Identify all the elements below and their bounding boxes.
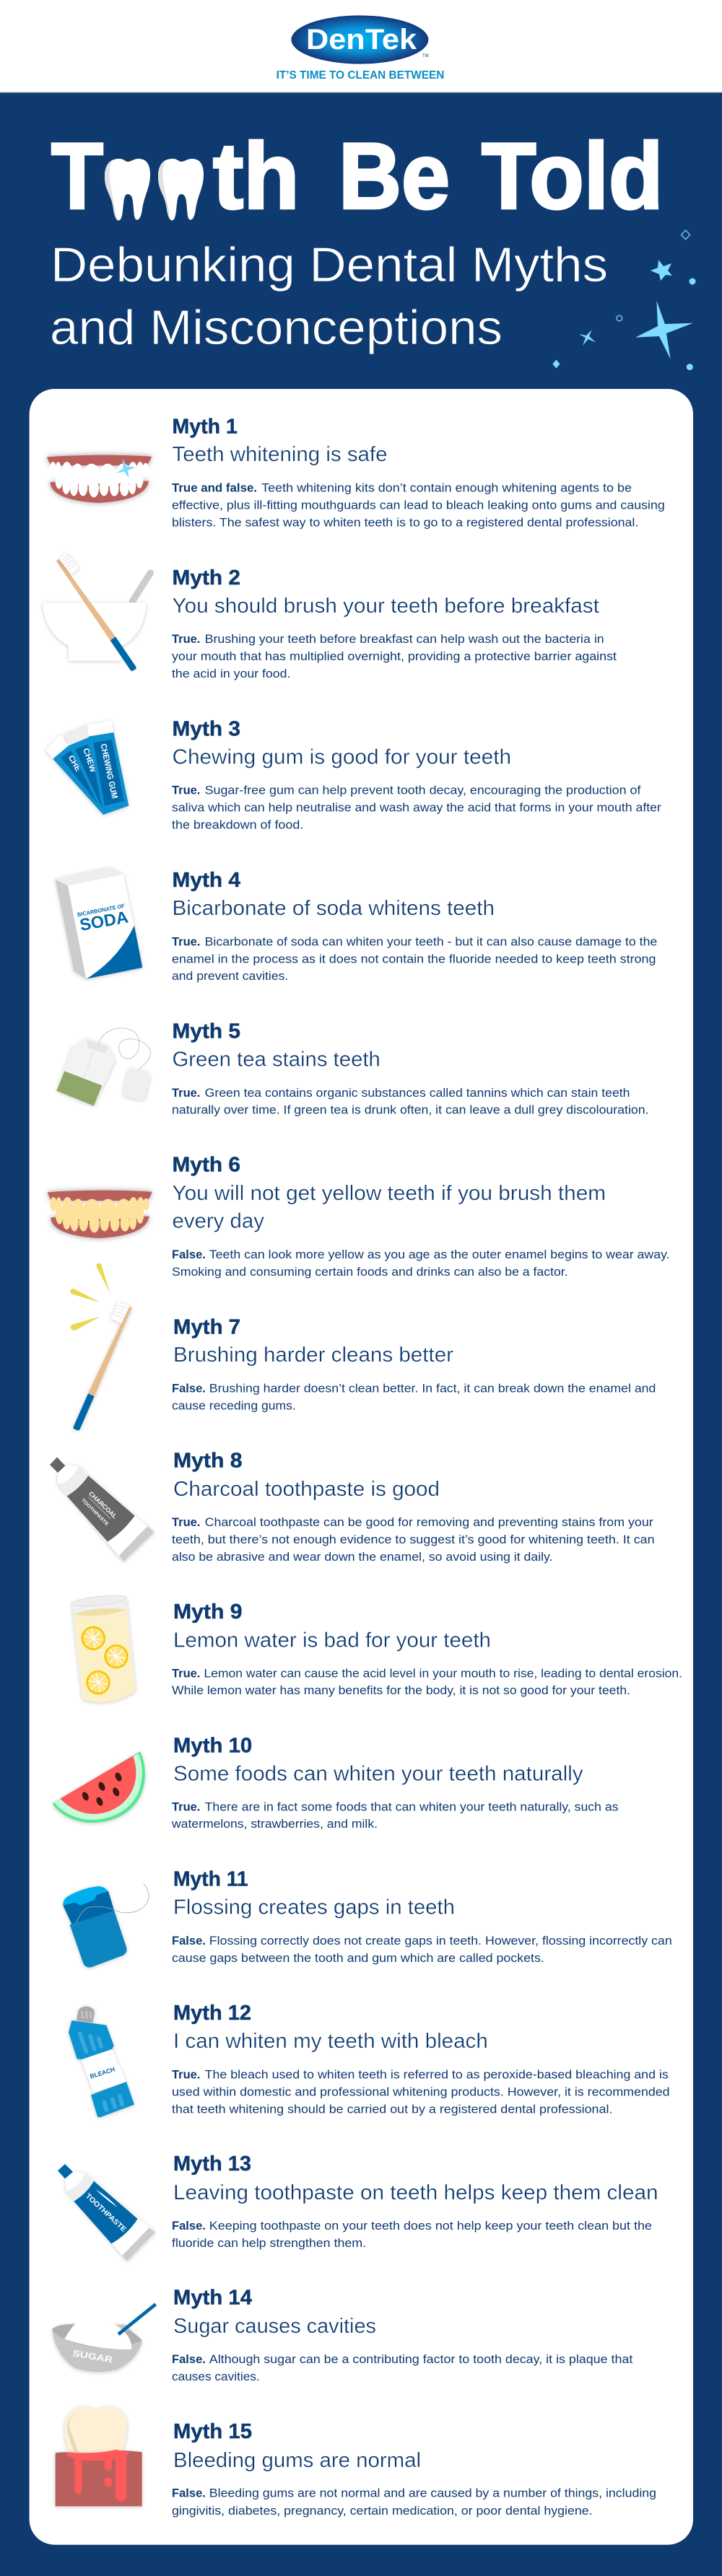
icon: chewing gum sticks bbox=[45, 720, 129, 815]
body text: Teeth can look more yellow as you age as the outer enamel begins to wear away. bbox=[209, 1248, 670, 1261]
body text bbox=[172, 1087, 648, 1117]
body text: gingivitis, diabetes, pregnancy, certain medication, or poor dental hygiene. bbox=[172, 2505, 593, 2518]
body text: Bicarbonate of soda can whiten your teeth - but it can also cause damage to the bbox=[205, 935, 657, 948]
body text bbox=[172, 1667, 682, 1697]
icon: toothbrush with yellow rays bbox=[70, 1263, 132, 1430]
logo: DenTek oval: DenTek bbox=[306, 24, 417, 56]
body text: False. bbox=[172, 1248, 206, 1261]
panel: myths card bbox=[30, 389, 693, 2545]
body text: True. bbox=[172, 633, 200, 646]
body text bbox=[172, 1248, 670, 1279]
icon: yellow teeth bbox=[48, 1191, 152, 1238]
body text: that teeth whitening should be carried out by a registered dental professional. bbox=[172, 2103, 612, 2116]
body text bbox=[172, 2220, 652, 2250]
body text: blisters. The safest way to whiten teeth is to go to a registered dental professional. bbox=[172, 516, 638, 529]
body text: the breakdown of food. bbox=[172, 818, 303, 831]
body text: Teeth whitening kits don’t contain enough whitening agents to be bbox=[261, 482, 632, 495]
body text: enamel in the process as it does not contain the fluoride needed to keep teeth strong bbox=[172, 952, 656, 965]
myth 10: Myth 10 bbox=[173, 1735, 252, 1758]
myth 6: every day bbox=[172, 1210, 265, 1233]
myth 1: Myth 1 bbox=[172, 416, 238, 439]
icon: blue toothpaste tube: TOOTHPASTE bbox=[84, 2192, 128, 2234]
body text: the acid in your food. bbox=[172, 667, 290, 680]
body text: False. bbox=[172, 1935, 206, 1948]
logo tagline: IT’S TIME TO CLEAN BETWEEN bbox=[277, 69, 444, 82]
body text: causes cavities. bbox=[172, 2370, 260, 2383]
subtitle: and Misconceptions bbox=[50, 300, 503, 355]
body text: Although sugar can be a contributing factor to tooth decay, it is plaque that bbox=[209, 2353, 633, 2366]
body text: Bleeding gums are not normal and are caused by a number of things, including bbox=[209, 2487, 656, 2500]
myth 3: Chewing gum is good for your teeth bbox=[172, 745, 511, 768]
myth 13 bbox=[58, 2152, 658, 2261]
logo: DenTek oval bbox=[291, 15, 429, 64]
myth 12: Myth 12 bbox=[173, 2002, 251, 2025]
body text: There are in fact some foods that can whiten your teeth naturally, such as bbox=[205, 1801, 619, 1814]
body text bbox=[172, 935, 657, 983]
body text: False. bbox=[172, 1383, 206, 1396]
myth 9 bbox=[71, 1593, 682, 1702]
body text: True. bbox=[172, 1087, 200, 1100]
body text: Flossing correctly does not create gaps in teeth. However, flossing incorrectly can bbox=[209, 1935, 672, 1948]
icon: glass of lemon water bbox=[71, 1593, 136, 1702]
myth 7: Brushing harder cleans better bbox=[173, 1344, 454, 1367]
myth 13: Myth 13 bbox=[173, 2152, 251, 2176]
body text: teeth, but there’s not enough evidence to suggest it’s good for whitening teeth. It can bbox=[172, 1533, 655, 1546]
myth 8 bbox=[50, 1449, 655, 1564]
body text bbox=[172, 2487, 656, 2518]
myth 14: Myth 14 bbox=[173, 2287, 252, 2310]
logo: DenTek oval: TM bbox=[422, 54, 429, 58]
body text bbox=[172, 633, 617, 680]
myth 8: Myth 8 bbox=[173, 1449, 243, 1472]
subtitle: Debunking Dental Myths bbox=[51, 237, 608, 292]
icon: charcoal toothpaste tube: TOOTHPASTE bbox=[80, 1498, 110, 1527]
myth 2 bbox=[43, 553, 617, 680]
body text: True. bbox=[172, 1801, 200, 1814]
body text: False. bbox=[172, 2220, 206, 2233]
icon: charcoal toothpaste tube: CHARCOAL bbox=[87, 1490, 119, 1520]
myth 7: Myth 7 bbox=[173, 1315, 240, 1339]
icon: dental floss box bbox=[63, 1884, 149, 1968]
icon: bleach bottle: BLEACH bbox=[89, 2066, 116, 2080]
body text bbox=[172, 2068, 670, 2116]
icon: chewing gum sticks: CHEW bbox=[81, 747, 97, 774]
icon: tooth with bleeding gum bbox=[56, 2407, 142, 2506]
icon: green tea bag bbox=[56, 1028, 151, 1106]
icon: bicarbonate of soda box: BICARBONATE OF bbox=[77, 903, 126, 918]
icon: tooth letter o second bbox=[158, 159, 204, 220]
icon: bicarbonate of soda box: SODA bbox=[78, 908, 130, 934]
icon: blue toothpaste tube bbox=[58, 2164, 155, 2261]
body text: The bleach used to whiten teeth is referred to as peroxide-based bleaching and is bbox=[205, 2068, 669, 2081]
body text: your mouth that has multiplied overnight, providing a protective barrier against bbox=[172, 650, 617, 663]
myth 5 bbox=[56, 1020, 649, 1117]
body text: cause gaps between the tooth and gum which are called pockets. bbox=[172, 1952, 544, 1965]
body text: Lemon water can cause the acid level in your mouth to rise, leading to dental erosion. bbox=[204, 1667, 682, 1680]
icon: sugar bowl with spoon bbox=[52, 2304, 156, 2372]
body text: Brushing your teeth before breakfast can help wash out the bacteria in bbox=[205, 633, 604, 646]
body text: naturally over time. If green tea is drunk often, it can leave a dull grey discolouration. bbox=[172, 1104, 648, 1117]
myth 9: Myth 9 bbox=[173, 1600, 243, 1624]
myth 4 bbox=[56, 867, 657, 983]
body text: and prevent cavities. bbox=[172, 970, 288, 983]
body text bbox=[171, 1801, 618, 1831]
subtitle bbox=[50, 237, 608, 355]
title: Tooth Be Told: th bbox=[213, 123, 300, 229]
myth 13: Leaving toothpaste on teeth helps keep them clean bbox=[173, 2181, 658, 2204]
myth 5: Myth 5 bbox=[172, 1020, 240, 1043]
myth 6: Myth 6 bbox=[172, 1153, 240, 1176]
icon: watermelon slice bbox=[53, 1751, 145, 1823]
myth 4: Myth 4 bbox=[172, 869, 240, 892]
myth 7 bbox=[70, 1263, 656, 1430]
icon: bowl and toothbrush bbox=[43, 553, 150, 671]
myth 12: I can whiten my teeth with bleach bbox=[173, 2030, 488, 2053]
myth 10 bbox=[53, 1735, 619, 1831]
title: Tooth Be Told: T bbox=[51, 123, 103, 229]
myth 14 bbox=[52, 2287, 633, 2383]
body text: Smoking and consuming certain foods and drinks can also be a factor. bbox=[172, 1266, 568, 1279]
icon: bicarbonate of soda box bbox=[56, 867, 142, 979]
icon: sugar bowl with spoon: SUGAR bbox=[71, 2348, 113, 2365]
myth 11: Myth 11 bbox=[173, 1868, 248, 1891]
body text: watermelons, strawberries, and milk. bbox=[171, 1818, 378, 1831]
title: Tooth Be Told: Be bbox=[339, 123, 450, 229]
body text: used within domestic and professional whitening products. However, it is recommended bbox=[172, 2085, 670, 2098]
myth 9: Lemon water is bad for your teeth bbox=[173, 1629, 491, 1652]
body text: Keeping toothpaste on your teeth does not help keep your teeth clean but the bbox=[209, 2220, 652, 2233]
myth 15: Myth 15 bbox=[173, 2420, 252, 2443]
icon: chewing gum sticks: CHEWING GUM bbox=[98, 743, 119, 799]
icon: sparkles bbox=[552, 230, 696, 370]
body text: True. bbox=[172, 935, 200, 948]
myth 4: Bicarbonate of soda whitens teeth bbox=[172, 897, 495, 920]
header band with logo bbox=[0, 0, 722, 92]
icon: chewing gum sticks: CHE bbox=[66, 754, 82, 774]
myth 14: Sugar causes cavities bbox=[173, 2315, 376, 2338]
body text: True. bbox=[172, 1516, 200, 1529]
icon: bleach bottle bbox=[69, 2007, 134, 2117]
body text bbox=[172, 784, 661, 831]
myth 11 bbox=[63, 1868, 672, 1968]
body text: effective, plus ill-fitting mouthguards can lead to bleach leaking onto gums and causing bbox=[172, 499, 665, 512]
body text bbox=[172, 1935, 672, 1965]
myth 1: Teeth whitening is safe bbox=[172, 443, 387, 466]
body text: fluoride can help strengthen them. bbox=[172, 2237, 366, 2250]
body text: cause receding gums. bbox=[172, 1400, 296, 1413]
myth 2: Myth 2 bbox=[172, 566, 240, 590]
body text: True and false. bbox=[172, 482, 257, 495]
myth 5: Green tea stains teeth bbox=[172, 1048, 380, 1071]
body text bbox=[172, 2353, 633, 2383]
myth 15 bbox=[56, 2407, 656, 2518]
body text: False. bbox=[172, 2487, 206, 2500]
body text: Brushing harder doesn’t clean better. In fact, it can break down the enamel and bbox=[209, 1383, 656, 1396]
myth 6 bbox=[48, 1153, 670, 1279]
title: Tooth Be Told bbox=[51, 123, 663, 229]
body text bbox=[172, 1383, 656, 1413]
body text: Green tea contains organic substances called tannins which can stain teeth bbox=[205, 1087, 630, 1100]
myth 15: Bleeding gums are normal bbox=[173, 2449, 421, 2472]
title: Tooth Be Told: Told bbox=[482, 123, 663, 229]
myth 12 bbox=[69, 2002, 670, 2117]
myth 6: You will not get yellow teeth if you brush them bbox=[172, 1182, 606, 1205]
body text: also be abrasive and wear down the enamel, so avoid using it daily. bbox=[172, 1551, 553, 1564]
icon: tooth letter o bbox=[105, 159, 150, 220]
body text bbox=[172, 482, 665, 529]
icon: white teeth with sparkle bbox=[47, 455, 152, 503]
body text: Sugar-free gum can help prevent tooth decay, encouraging the production of bbox=[205, 784, 641, 797]
icon: charcoal toothpaste tube bbox=[50, 1457, 154, 1561]
body text: False. bbox=[172, 2353, 206, 2366]
body text: saliva which can help neutralise and wash away the acid that forms in your mouth after bbox=[172, 801, 661, 814]
myth 10: Some foods can whiten your teeth naturally bbox=[173, 1762, 583, 1785]
body text: Charcoal toothpaste can be good for removing and preventing stains from your bbox=[205, 1516, 653, 1529]
myth 3: Myth 3 bbox=[172, 718, 240, 741]
body text: True. bbox=[172, 784, 200, 797]
body text: True. bbox=[172, 2068, 200, 2081]
myth 8: Charcoal toothpaste is good bbox=[173, 1478, 440, 1501]
myth 3 bbox=[45, 718, 661, 831]
myth 1 bbox=[47, 416, 665, 529]
myth 11: Flossing creates gaps in teeth bbox=[173, 1896, 455, 1919]
body text bbox=[172, 1516, 655, 1564]
body text: True. bbox=[172, 1667, 200, 1680]
body text: While lemon water has many benefits for the body, it is not so good for your teeth. bbox=[172, 1684, 630, 1697]
myth 2: You should brush your teeth before breakfast bbox=[172, 595, 599, 618]
